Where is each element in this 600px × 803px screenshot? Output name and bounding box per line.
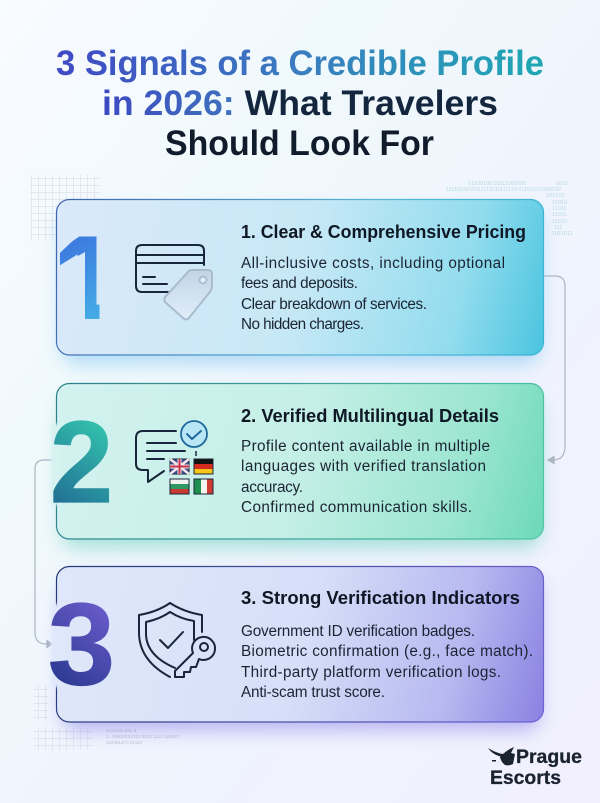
icon: credit card and price tag: [136, 245, 212, 320]
decorative binary code: top right: 11101: [552, 212, 566, 218]
icon: speech bubble with check and flags: [136, 421, 213, 494]
panel: clear pricing: [52, 200, 544, 364]
decorative grid: bottom left: [34, 685, 92, 750]
body text: languages with verified translation: [241, 458, 486, 475]
body text: [241, 255, 505, 333]
flag: Germany: [194, 459, 213, 474]
number 2: 2: [50, 397, 113, 527]
flag: Italy: [194, 479, 213, 494]
heading: 1. Clear & Comprehensive Pricing: [241, 221, 526, 242]
heading: 3. Strong Verification Indicators: [241, 587, 520, 608]
title: in 2026: What Travelers: [102, 84, 498, 123]
logo: Prague Escorts: [488, 746, 582, 789]
body text: Confirmed communication skills.: [241, 499, 472, 516]
body text: [241, 438, 490, 516]
decorative binary code: bottom left: 0119101 841 5: [106, 728, 137, 733]
decorative binary code: top right: 1011: [556, 181, 568, 187]
wordmark: Escorts: [490, 767, 561, 789]
icon: mask: [488, 747, 515, 765]
number 2 halo: [51, 424, 62, 505]
body text: Biometric confirmation (e.g., face match).: [241, 643, 533, 660]
flag: UK: [170, 459, 189, 474]
decorative binary code: top right: 10010: [552, 200, 567, 206]
number 1: 1: [52, 213, 117, 343]
body text: Government ID verification badges.: [241, 623, 475, 640]
icon: shield with check and key: [139, 603, 215, 677]
body text: fees and deposits.: [241, 275, 358, 292]
body text: [241, 623, 533, 701]
connector arrow: card 1 to card 2: [544, 276, 565, 464]
decorative binary code: bottom left: [106, 728, 180, 745]
decorative binary code: top right: [446, 181, 573, 237]
number 3: 3: [48, 579, 115, 709]
body text: Anti-scam trust score.: [241, 684, 385, 701]
decorative binary code: top right: 11010: [552, 219, 567, 225]
body text: Profile content available in multiple: [241, 438, 490, 455]
panel: multilingual details: [50, 384, 544, 548]
decorative binary code: top right: 101010: [546, 193, 564, 199]
heading: 2. Verified Multilingual Details: [241, 405, 499, 426]
title: Should Look For: [165, 124, 434, 163]
body text: accuracy.: [241, 479, 303, 496]
body text: All-inclusive costs, including optional: [241, 255, 505, 272]
decorative binary code: top right: 11011: [552, 206, 566, 212]
wordmark: [490, 746, 582, 789]
decorative binary code: top right: 01100100 01111000001: [468, 181, 526, 187]
panel: verification indicators: [48, 566, 544, 731]
body text: No hidden charges.: [241, 316, 364, 333]
decorative grid: top left: [30, 175, 100, 241]
body text: Third-party platform verification logs.: [241, 664, 501, 681]
decorative binary code: bottom left: 1 . 00934101010 9101 1111 140047: [106, 734, 180, 739]
flag: Bulgaria: [170, 479, 189, 494]
connector arrow: card 2 to card 3: [35, 460, 56, 648]
title: 3 Signals of a Credible Profile: [56, 44, 544, 83]
decorative binary code: top right: 1111010010111111011111110 01101010010010: [446, 187, 561, 193]
body text: Clear breakdown of services.: [241, 296, 427, 313]
decorative binary code: top right: 1011011: [552, 231, 573, 237]
wordmark: Prague: [516, 746, 582, 768]
number 3 halo: [51, 604, 62, 687]
decorative binary code: top right: 111: [554, 225, 562, 231]
decorative binary code: bottom left: 110001470 01110: [106, 740, 142, 745]
title: [56, 44, 544, 163]
